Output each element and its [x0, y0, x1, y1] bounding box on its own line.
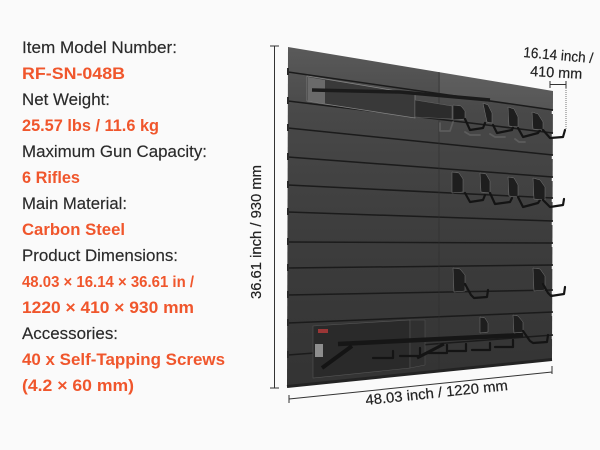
spec: accessories: 40 x Self-Tapping Screws: [22, 350, 225, 369]
spec: accessories: Accessories:: [22, 324, 118, 343]
brand label: [318, 329, 328, 333]
specification list: [22, 38, 225, 395]
left edge tabs: [287, 68, 289, 358]
spec: maximum gun capacity: [22, 142, 207, 187]
spec: net weight: [22, 90, 159, 135]
depth dimension: [523, 45, 595, 130]
right edge notches: [552, 111, 554, 339]
spec: item model number: RF-SN-048B: [22, 64, 125, 83]
spec: item model number: [22, 38, 177, 83]
spec: maximum gun capacity: 6 Rifles: [22, 168, 80, 187]
spec: item model number: Item Model Number:: [22, 38, 177, 57]
upper shelf rack: [307, 76, 490, 119]
depth dimension: 16.14 inch /: [523, 45, 595, 67]
spec: main material: Carbon Steel: [22, 220, 125, 239]
spec: accessories: (4.2 × 60 mm): [22, 376, 134, 395]
spec: net weight: Net Weight:: [22, 90, 110, 109]
height dimension: [249, 46, 279, 388]
width dimension: 48.03 inch / 1220 mm: [365, 378, 509, 409]
upper hooks: [440, 103, 565, 142]
middle hooks: [452, 172, 564, 207]
wall panel: [287, 47, 553, 387]
spec: maximum gun capacity: Maximum Gun Capacity:: [22, 142, 207, 161]
spec: product dimensions: 48.03 × 16.14 × 36.61 in /: [22, 274, 195, 291]
spec: accessories: [22, 324, 225, 395]
slat lines: [288, 72, 553, 355]
spec: net weight: 25.57 lbs / 11.6 kg: [22, 116, 159, 135]
spec: product dimensions: Product Dimensions:: [22, 246, 178, 265]
width dimension: [289, 366, 552, 409]
QR tag: [315, 344, 323, 357]
depth dimension: 410 mm: [530, 64, 583, 83]
spec: product dimensions: 1220 × 410 × 930 mm: [22, 298, 194, 317]
lower hooks: [453, 268, 565, 298]
spec: product dimensions: [22, 246, 195, 317]
bottom shelf rack: [313, 315, 548, 378]
spec: main material: [22, 194, 127, 239]
height dimension: 36.61 inch / 930 mm: [249, 165, 265, 299]
spec: main material: Main Material:: [22, 194, 127, 213]
